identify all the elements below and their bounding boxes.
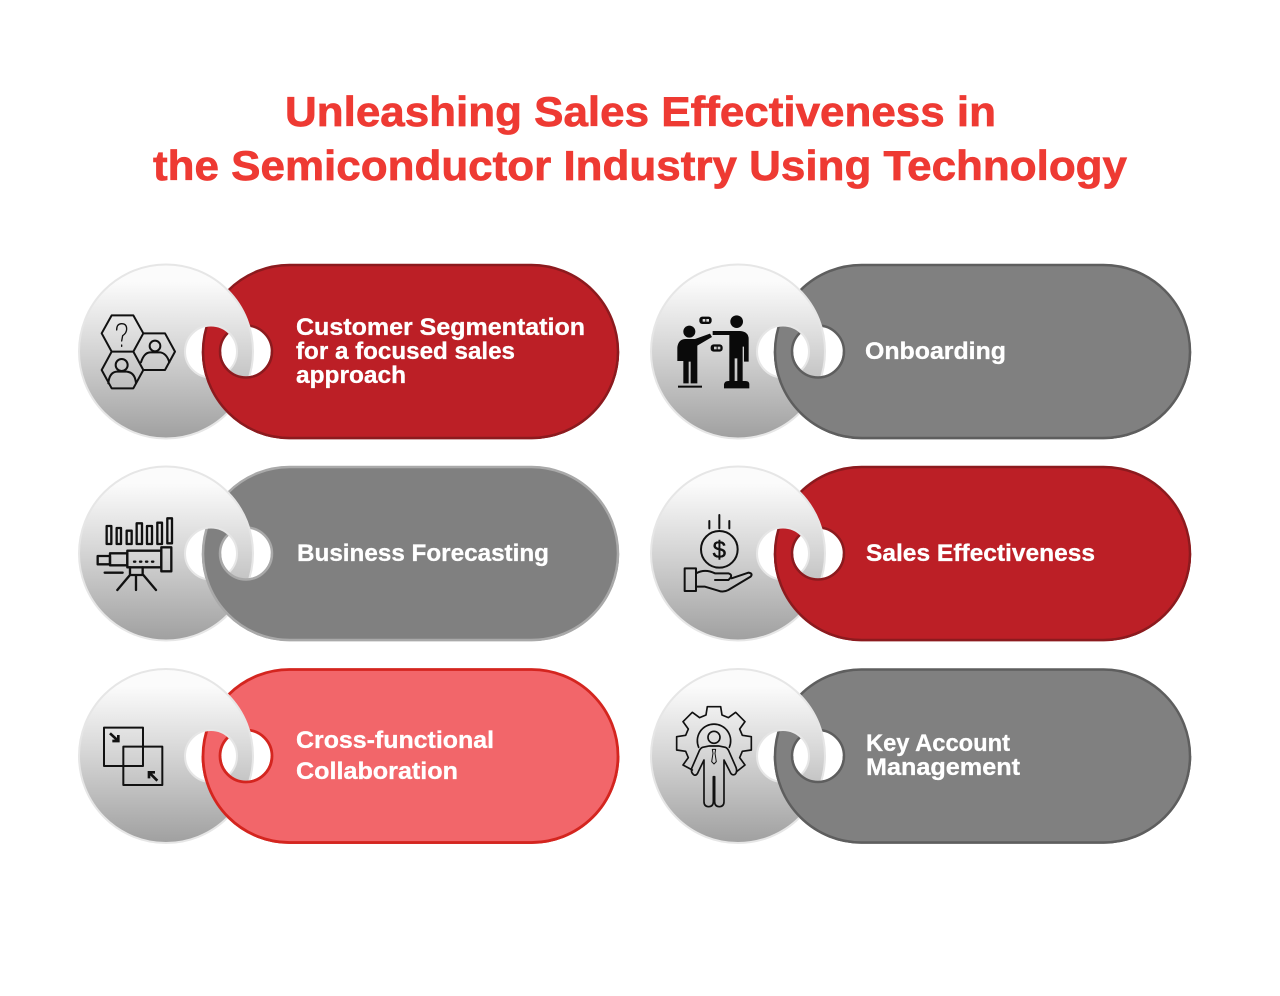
linked pill and disc [651, 264, 1190, 438]
label: Onboarding [865, 338, 1006, 365]
linked pill and disc [79, 264, 618, 438]
label: Customer Segmentation [296, 314, 585, 341]
label [866, 730, 1020, 781]
label: Collaboration [296, 758, 458, 785]
icon: overlapping squares with arrows [104, 728, 162, 785]
panel: onboarding [651, 264, 1190, 438]
linked pill and disc [79, 669, 618, 843]
label: Key Account [866, 730, 1010, 757]
linked pill and disc [651, 669, 1190, 843]
label [296, 727, 494, 785]
label: Management [866, 754, 1020, 781]
icon: two people talking [677, 315, 749, 388]
title: Unleashing Sales Effectiveness in [285, 88, 996, 135]
panel: cross-functional collaboration [79, 669, 618, 843]
linked pill and disc [79, 466, 618, 640]
panel: sales effectiveness [651, 466, 1190, 640]
icon: hand holding dollar coin: $ [713, 537, 726, 564]
label: Cross-functional [296, 727, 494, 754]
label: Sales Effectiveness [866, 540, 1095, 567]
icon: telescope and bar chart [98, 518, 172, 590]
label [296, 314, 585, 389]
label: approach [296, 362, 406, 389]
panel: business forecasting [79, 466, 618, 640]
icon: hexagons with people and question mark [102, 315, 175, 388]
label: for a focused sales [296, 338, 515, 365]
linked pill and disc [651, 466, 1190, 640]
panel: customer segmentation [79, 264, 618, 438]
label: Business Forecasting [297, 540, 549, 567]
title: the Semiconductor Industry Using Technology [153, 142, 1128, 189]
title [153, 88, 1128, 189]
panel: key account management [651, 669, 1190, 843]
icon: person in gear [677, 707, 751, 807]
icon: hand holding dollar coin [685, 515, 752, 592]
